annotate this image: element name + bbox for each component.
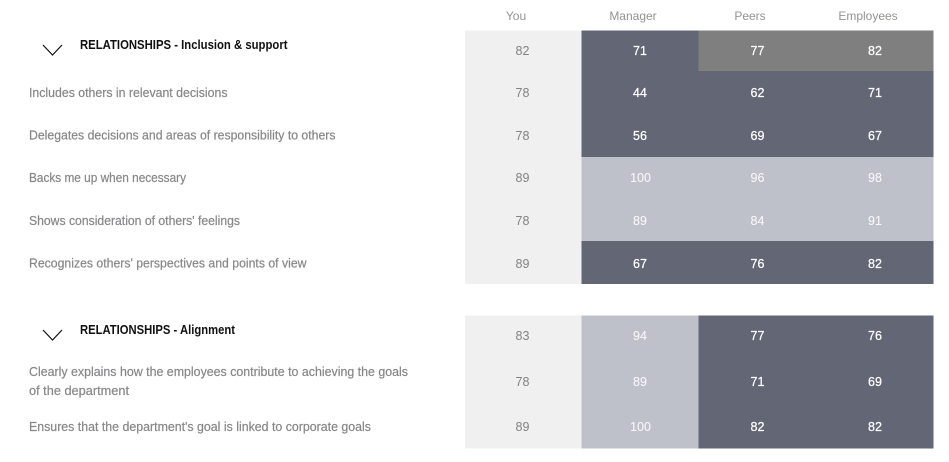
score table: inclusion and support: 100: [630, 171, 651, 185]
score table: alignment: 78: [516, 375, 529, 389]
score table: alignment: 77: [751, 329, 764, 343]
score table: inclusion and support: [465, 30, 934, 284]
score table: alignment: 82: [868, 420, 882, 434]
score table: alignment: 69: [868, 375, 882, 389]
column headers: Employees: [838, 9, 898, 23]
score table: alignment: [465, 316, 934, 448]
statement labels: inclusion and support: Backs me up when necessary: [29, 171, 187, 185]
score table: alignment: 76: [868, 329, 882, 343]
panel: inclusion and support: [29, 30, 934, 284]
score table: inclusion and support: 78: [516, 129, 529, 143]
score table: inclusion and support: 67: [868, 129, 882, 143]
statement labels: inclusion and support: Delegates decisions and areas of responsibility to others: [29, 128, 336, 142]
column headers: Peers: [734, 9, 766, 23]
score table: alignment: 100: [630, 420, 651, 434]
score table: inclusion and support: 78: [516, 214, 529, 228]
statement labels: inclusion and support: Recognizes others' perspectives and points of view: [29, 256, 307, 270]
score table: inclusion and support: 82: [516, 44, 529, 58]
score table: alignment: 82: [751, 420, 764, 434]
column headers: [506, 9, 898, 23]
score table: inclusion and support: 96: [751, 171, 764, 185]
statement labels: alignment: [29, 365, 408, 434]
statement labels: alignment: Ensures that the department's goal is linked to corporate goals: [29, 420, 371, 434]
score table: inclusion and support: 89: [516, 171, 529, 185]
score table: inclusion and support: 82: [868, 44, 882, 58]
score table: inclusion and support: 84: [751, 214, 764, 228]
score table: alignment: 89: [516, 420, 529, 434]
score table: inclusion and support: 71: [868, 86, 882, 100]
statement labels: alignment: of the department: [29, 384, 130, 398]
score table: alignment: 89: [633, 375, 647, 389]
score table: alignment: 71: [751, 375, 764, 389]
score table: inclusion and support: 91: [868, 214, 882, 228]
score table: inclusion and support: 82: [868, 257, 882, 271]
column headers: Manager: [609, 9, 657, 23]
score table: alignment: 94: [633, 329, 647, 343]
score table: inclusion and support: 62: [751, 86, 764, 100]
score table: inclusion and support: 67: [633, 257, 647, 271]
statement labels: inclusion and support: Includes others in relevant decisions: [29, 86, 228, 100]
score table: inclusion and support: 69: [751, 129, 764, 143]
icon: chevron inclusion: [43, 45, 62, 55]
score table: inclusion and support: 89: [516, 257, 529, 271]
heading: inclusion and support: RELATIONSHIPS - Inclusion & support: [80, 38, 288, 52]
statement labels: inclusion and support: Shows consideration of others' feelings: [29, 214, 240, 228]
statement labels: inclusion and support: [29, 86, 336, 270]
panel: alignment: [29, 316, 934, 448]
score table: inclusion and support: 77: [751, 44, 764, 58]
score table: inclusion and support: 71: [633, 44, 647, 58]
score table: inclusion and support: 56: [633, 129, 647, 143]
score table: inclusion and support: 78: [516, 86, 529, 100]
column headers: You: [506, 9, 526, 23]
score table: inclusion and support: 98: [868, 171, 882, 185]
score table: inclusion and support: 44: [633, 86, 647, 100]
score table: alignment: 83: [516, 329, 529, 343]
icon: chevron alignment: [43, 330, 62, 340]
score table: inclusion and support: 89: [633, 214, 647, 228]
score table: inclusion and support: 76: [751, 257, 764, 271]
statement labels: alignment: Clearly explains how the employees contribute to achieving the goals: [29, 365, 408, 379]
heading: alignment: RELATIONSHIPS - Alignment: [80, 323, 236, 337]
